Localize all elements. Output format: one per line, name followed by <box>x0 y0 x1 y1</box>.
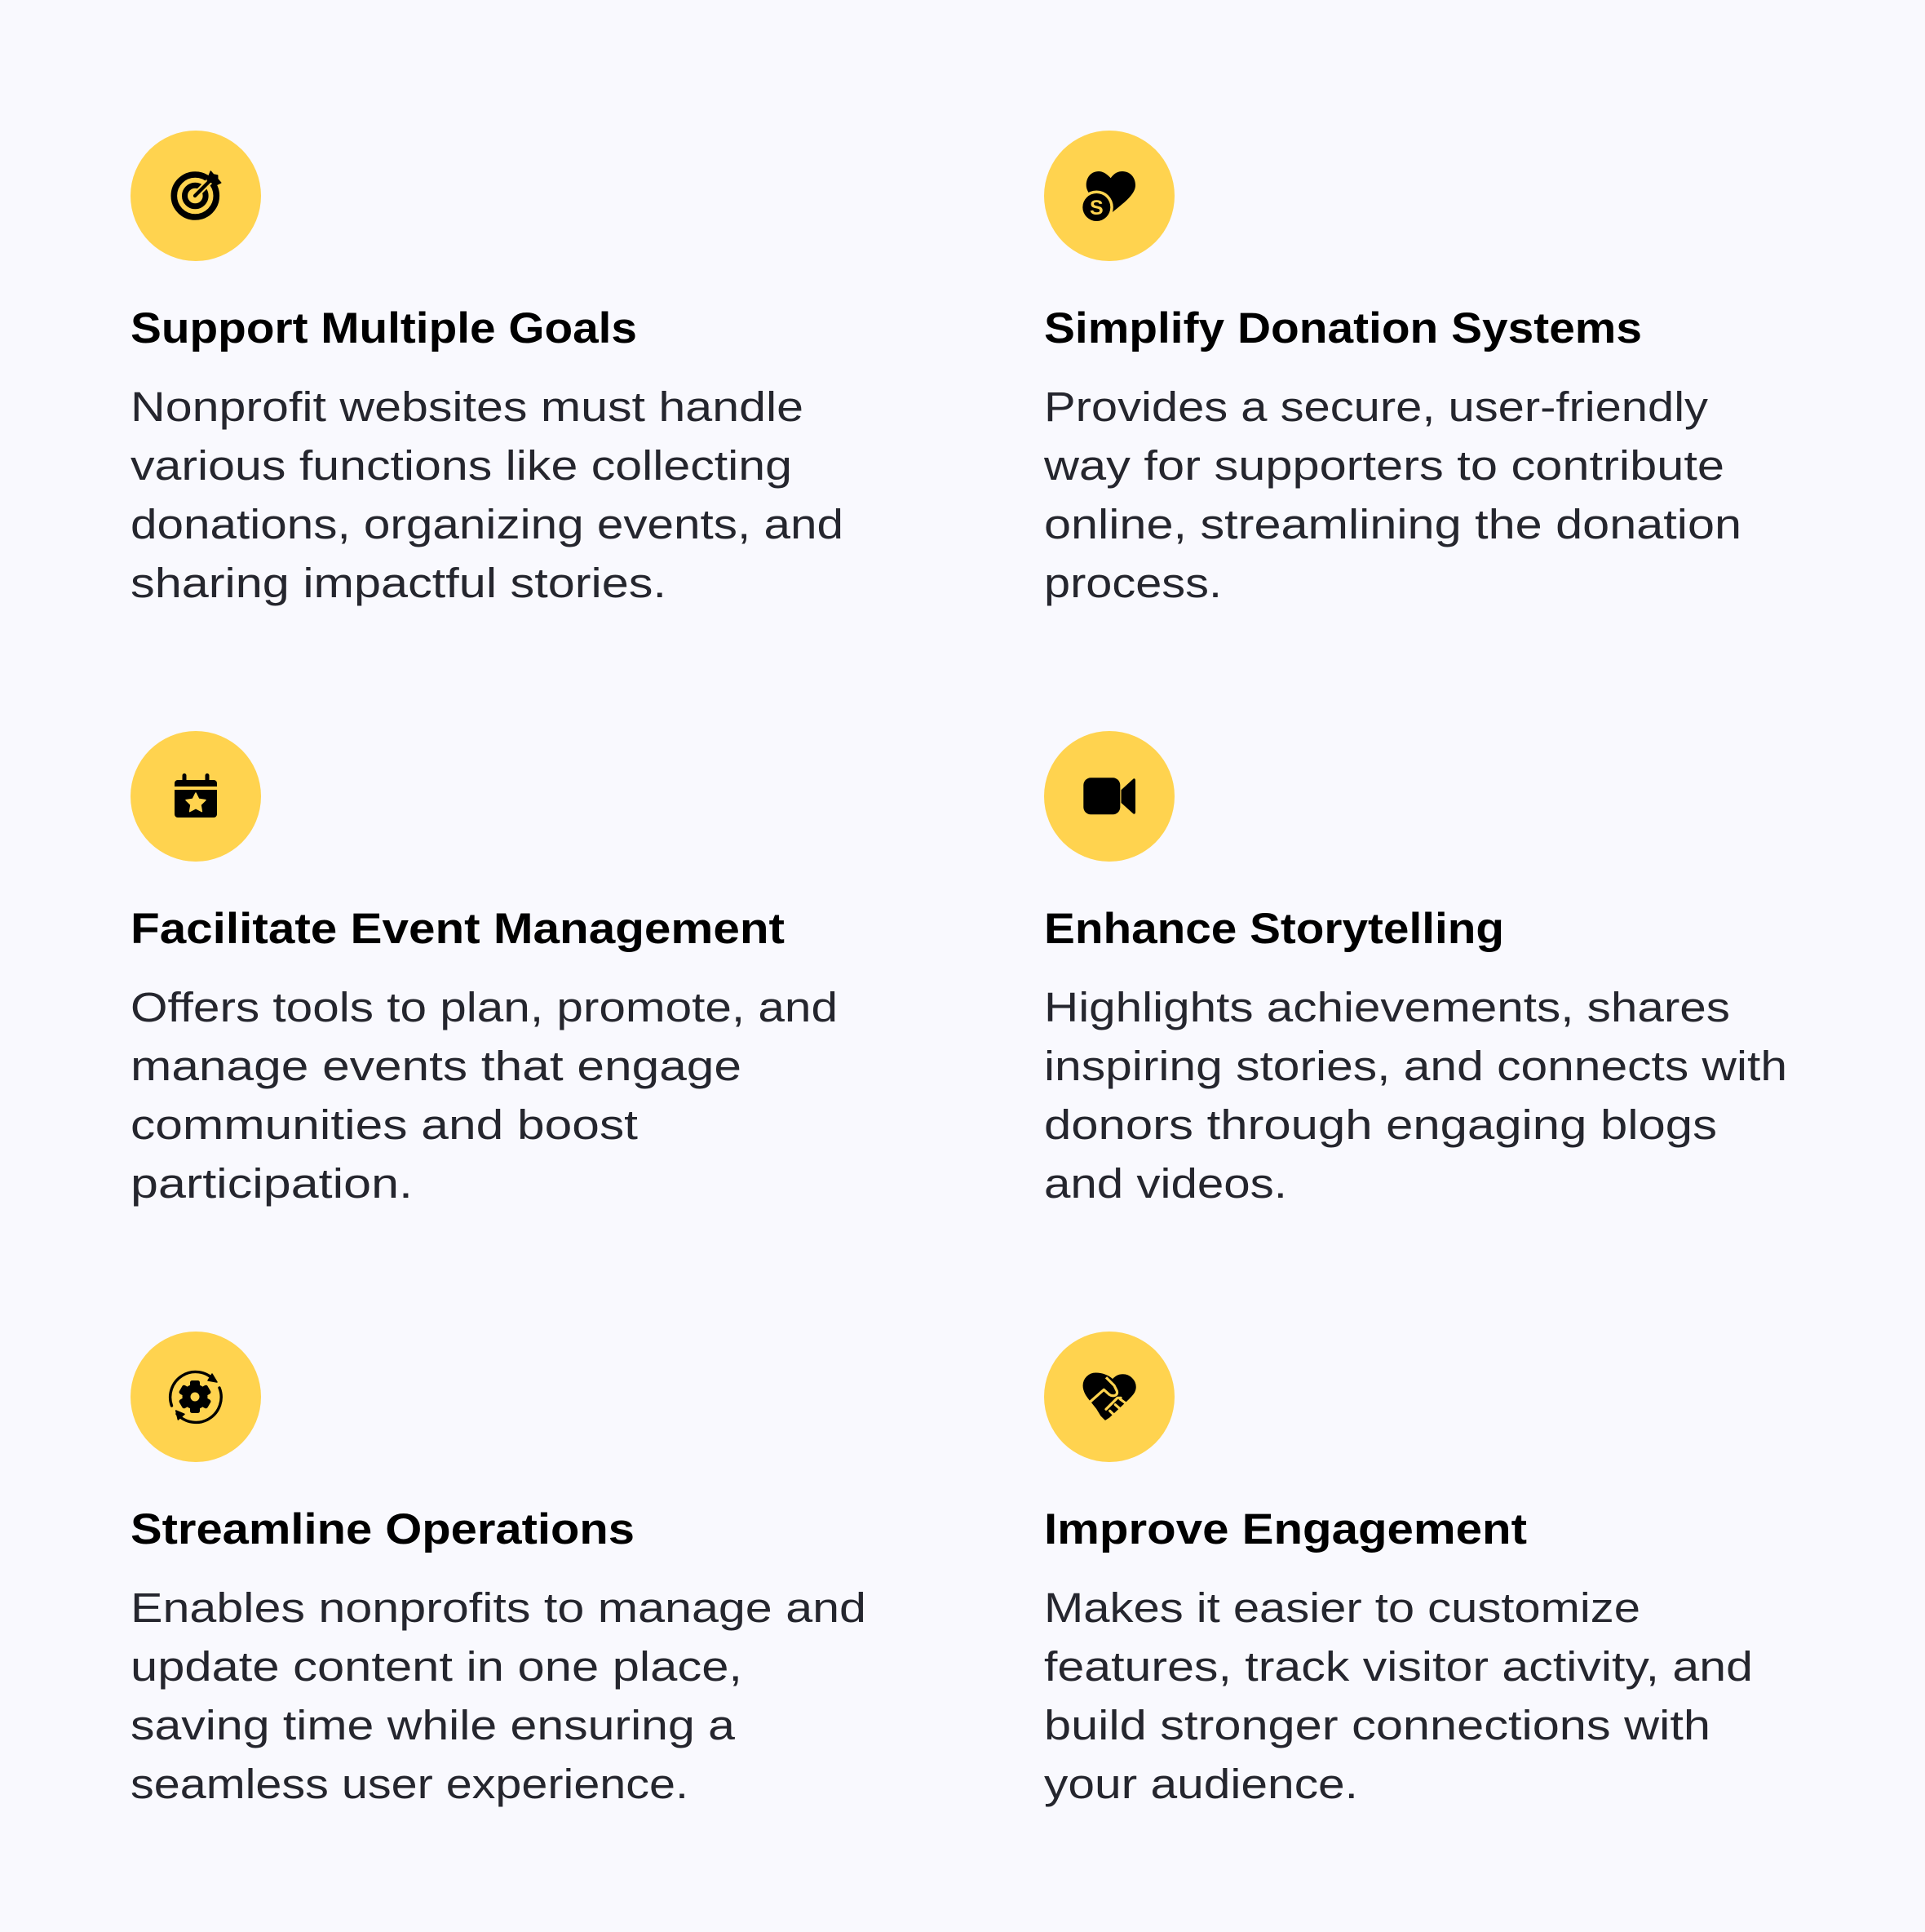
body text: your audience. <box>1044 1761 1358 1807</box>
body text: manage events that engage <box>131 1043 741 1089</box>
body text: features, track visitor activity, and <box>1044 1643 1753 1690</box>
icon: heart with dollar coin <box>1044 131 1175 261</box>
icon: calendar with star <box>131 731 261 862</box>
icon: target with dart <box>131 131 261 261</box>
body text <box>131 383 843 606</box>
body text: Makes it easier to customize <box>1044 1584 1640 1631</box>
body text <box>1044 984 1787 1207</box>
body text: seamless user experience. <box>131 1761 688 1807</box>
panel: Support Multiple Goals <box>131 131 843 606</box>
panel: Simplify Donation Systems <box>1043 131 1741 606</box>
panel: Facilitate Event Management <box>131 731 838 1207</box>
heading: Streamline Operations <box>131 1505 635 1553</box>
body text: Highlights achievements, shares <box>1044 984 1730 1030</box>
heading: Support Multiple Goals <box>131 304 637 352</box>
icon: gear with rotating arrows <box>131 1332 261 1462</box>
icon: video camera <box>1044 731 1175 862</box>
body text: Enables nonprofits to manage and <box>131 1584 866 1631</box>
body text: online, streamlining the donation <box>1044 501 1741 547</box>
body text: Offers tools to plan, promote, and <box>131 984 838 1030</box>
body text: participation. <box>131 1160 413 1207</box>
body text: communities and boost <box>131 1101 638 1148</box>
body text <box>1044 1584 1753 1807</box>
body text: donors through engaging blogs <box>1044 1101 1717 1148</box>
body text: Nonprofit websites must handle <box>131 383 803 430</box>
panel: Streamline Operations <box>131 1332 866 1807</box>
body text <box>131 1584 866 1807</box>
body text: various functions like collecting <box>131 442 792 489</box>
body text: donations, organizing events, and <box>131 501 843 547</box>
heading: Simplify Donation Systems <box>1044 304 1642 352</box>
body text: build stronger connections with <box>1044 1702 1710 1748</box>
heading: Improve Engagement <box>1044 1505 1527 1553</box>
heading: Facilitate Event Management <box>131 905 785 953</box>
icon: handshake heart <box>1044 1332 1175 1462</box>
body text: Provides a secure, user-friendly <box>1044 383 1709 430</box>
body text: inspiring stories, and connects with <box>1044 1043 1787 1089</box>
body text: saving time while ensuring a <box>131 1702 736 1748</box>
body text <box>131 984 838 1207</box>
body text: and videos. <box>1044 1160 1287 1207</box>
panel: Improve Engagement <box>1044 1332 1753 1807</box>
heading: Enhance Storytelling <box>1044 905 1504 953</box>
body text: way for supporters to contribute <box>1043 442 1724 489</box>
icon: heart with dollar coin: S <box>1090 197 1104 219</box>
panel: Enhance Storytelling <box>1044 731 1787 1207</box>
body text <box>1043 383 1741 606</box>
body text: sharing impactful stories. <box>131 560 666 606</box>
body text: process. <box>1044 560 1222 606</box>
body text: update content in one place, <box>131 1643 742 1690</box>
